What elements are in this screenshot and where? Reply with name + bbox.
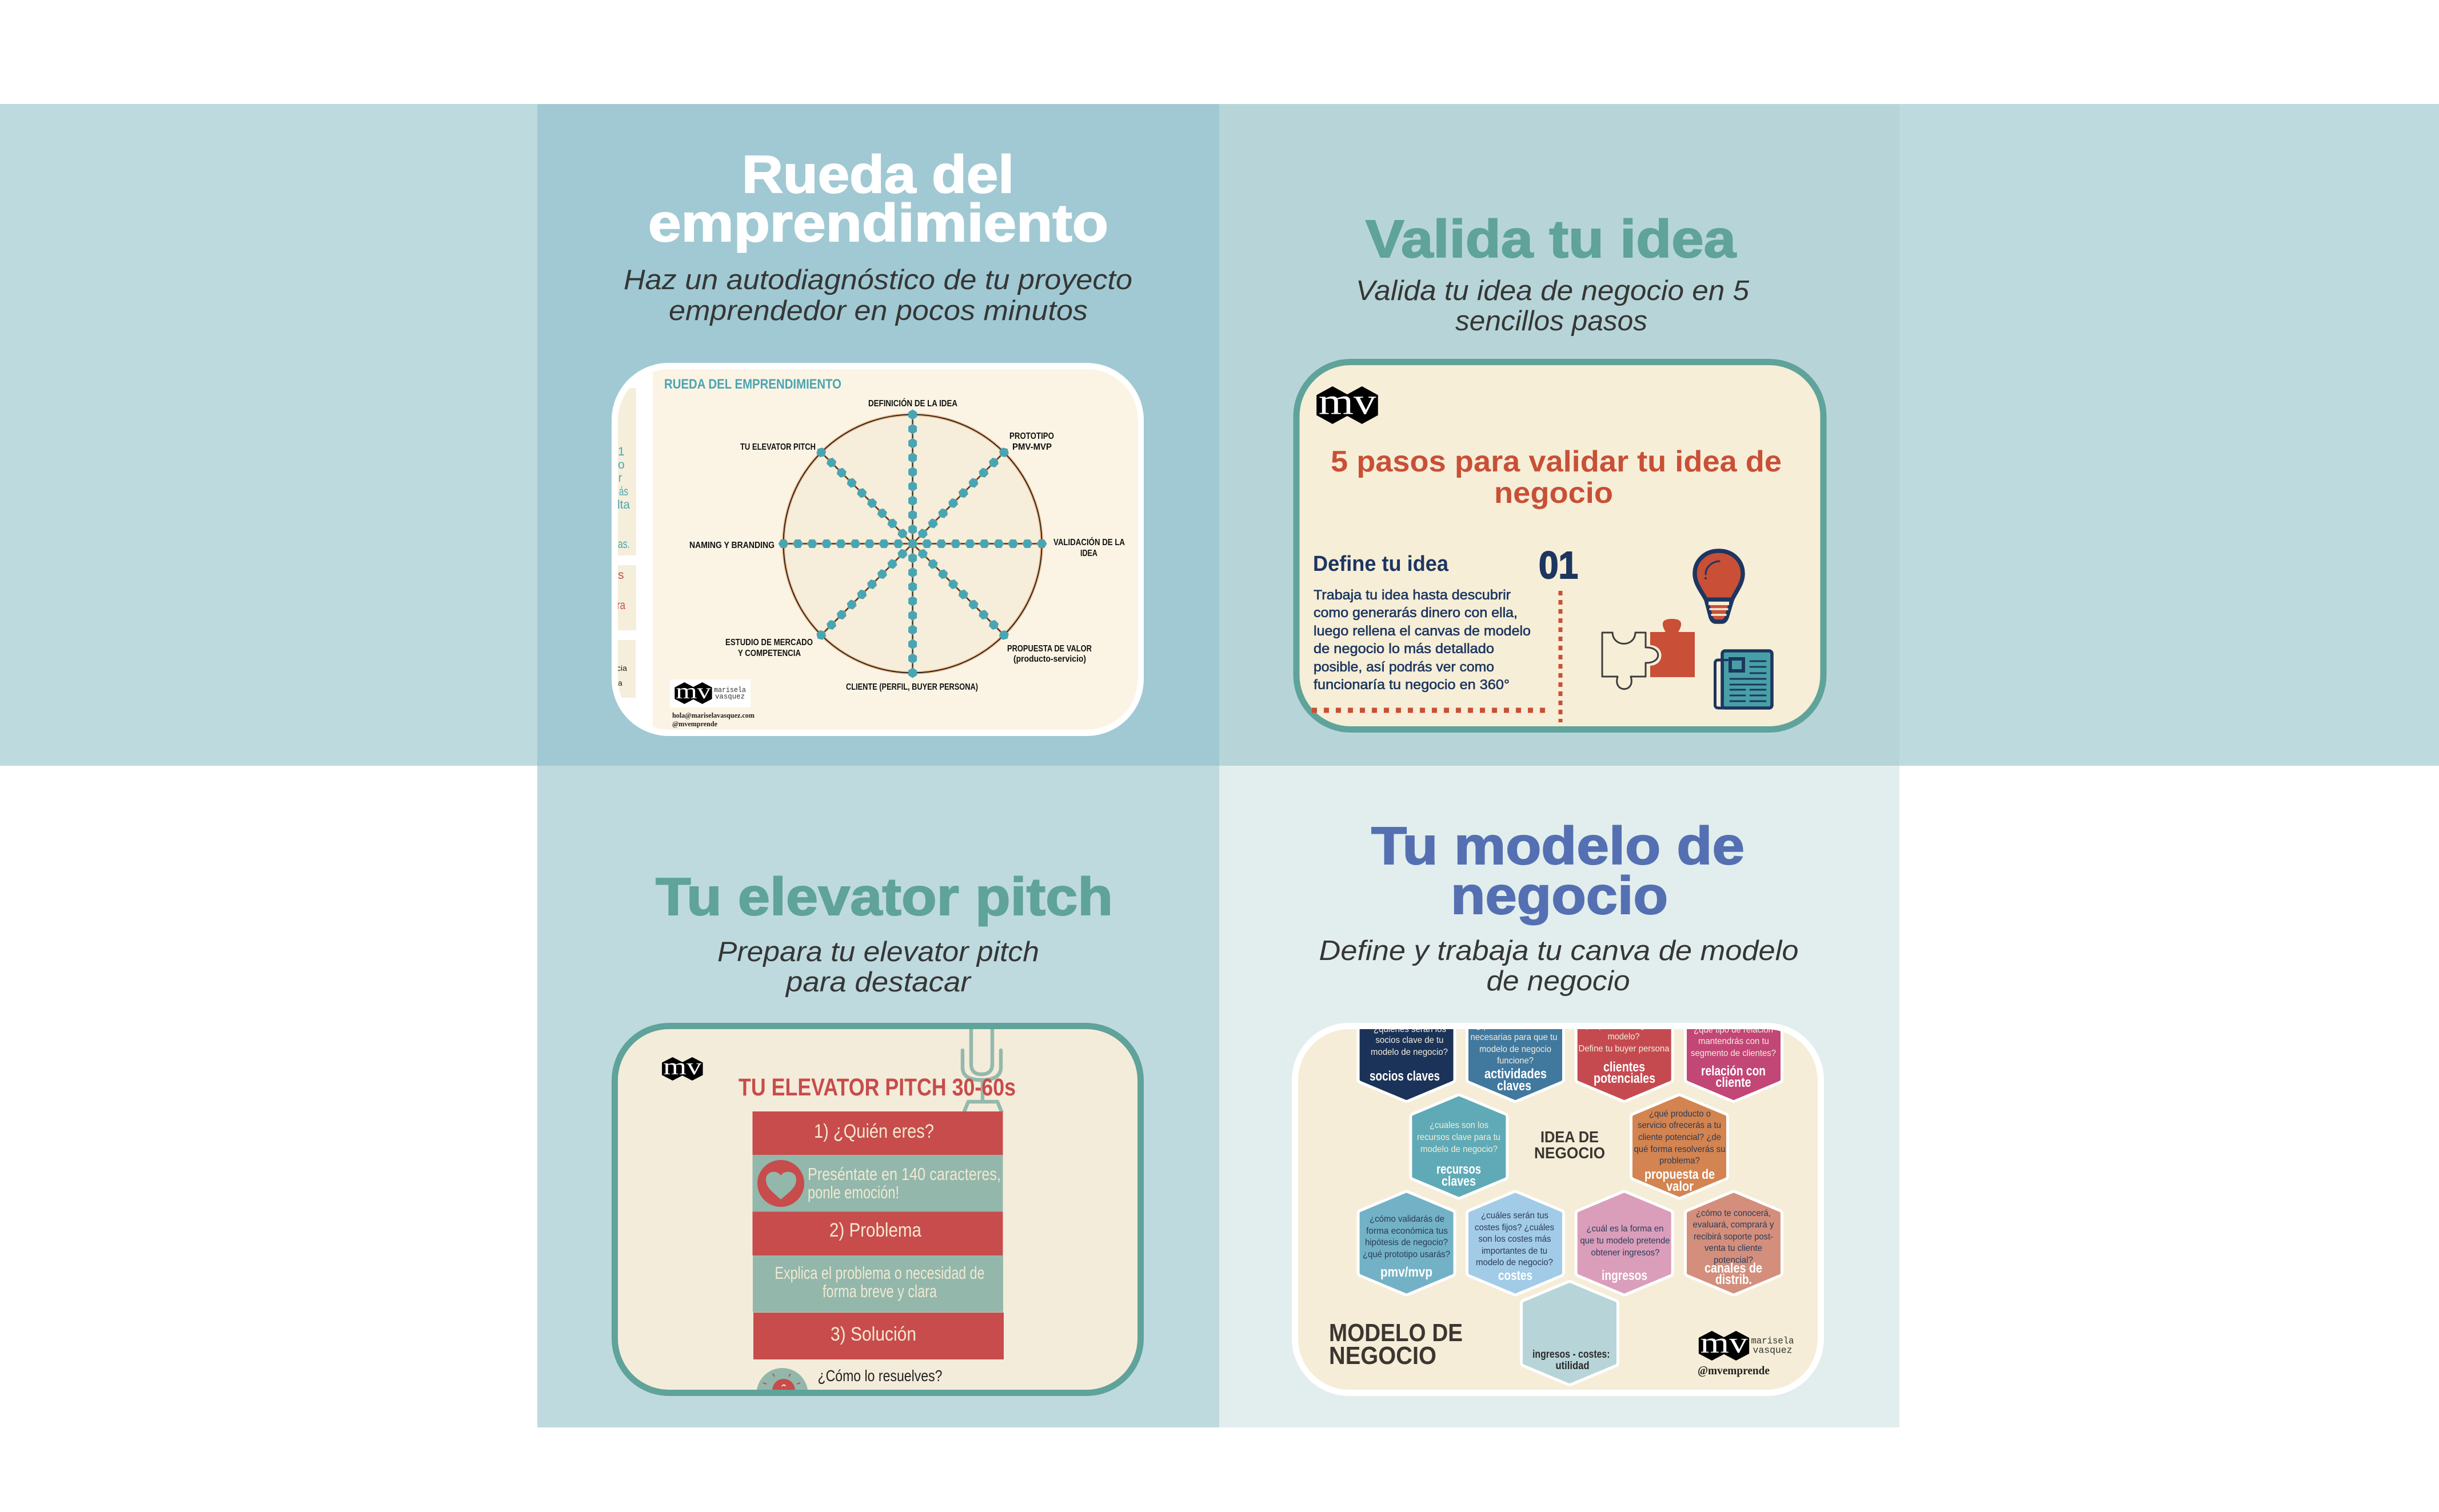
row: presentate: Preséntate en 140 caracteres, <box>808 1164 1001 1184</box>
hexagon: pmv/mvp: forma económica tus <box>1366 1226 1448 1236</box>
contact details <box>672 711 755 728</box>
cropped side notes: lta <box>617 498 630 511</box>
subtitle: Valida tu idea de negocio en 5 <box>1356 275 1750 306</box>
step body text: posible, así podrás ver como <box>1314 659 1494 675</box>
hexagon: pmv/mvp: ¿qué prototipo usarás? <box>1363 1250 1450 1259</box>
wheel labels: (producto-servicio) <box>1013 654 1086 664</box>
cropped side notes: ra <box>617 599 625 612</box>
worksheet title: TU ELEVATOR PITCH 30-60s <box>739 1074 1016 1101</box>
subtitle: de negocio <box>1486 966 1630 997</box>
logo: marisela vasquez: marisela <box>1751 1336 1794 1347</box>
subtitle <box>1319 935 1798 997</box>
hexagon: clientes potenciales: Define tu buyer persona <box>1579 1044 1670 1054</box>
step body text: como generarás dinero con ella, <box>1314 605 1518 621</box>
hexagon: socios claves: ¿quiénes serán los <box>1374 1025 1446 1034</box>
step number: 01 <box>1539 544 1578 587</box>
heading: tu modelo de negocio: negocio <box>1451 866 1668 925</box>
hexagon: propuesta de valor: cliente potencial? ¿de <box>1638 1133 1721 1142</box>
heading: rueda del emprendimiento: emprendimiento <box>648 193 1108 253</box>
subtitle: sencillos pasos <box>1455 306 1647 337</box>
hexagon: pmv/mvp: pmv/mvp <box>1380 1265 1432 1280</box>
cropped side notes: a <box>618 678 622 687</box>
panel: tu elevator pitch <box>537 766 1219 1427</box>
hexagon: clientes potenciales <box>1579 1001 1670 1098</box>
icon: microphone <box>963 1026 1001 1111</box>
hexagon: actividades claves: funcione? <box>1497 1056 1534 1066</box>
cropped side notes <box>617 388 636 698</box>
background band: right <box>1899 104 2439 766</box>
icon: lightbulb <box>1695 551 1743 622</box>
hexagon: canales de distribucion: distrib. <box>1715 1272 1752 1287</box>
wheel labels: PMV-MVP <box>1012 442 1052 452</box>
hexagon: canales de distribucion: ¿cómo te conocerá, <box>1696 1209 1771 1218</box>
cropped side notes: ás <box>619 485 628 498</box>
hexagon: propuesta de valor: problema? <box>1659 1156 1700 1166</box>
row: quien eres: 1) ¿Quién eres? <box>814 1121 934 1142</box>
logo mv: mv <box>663 1054 702 1080</box>
wheel labels: DEFINICIÓN DE LA IDEA <box>868 398 957 409</box>
hexagon: actividades claves <box>1470 1001 1560 1098</box>
hexagon: ingresos menos costes: utilidad <box>1556 1360 1589 1372</box>
icon: idea circle <box>757 1368 808 1390</box>
background band: left <box>0 104 537 766</box>
step body text: Trabaja tu idea hasta descubrir <box>1314 587 1511 603</box>
hexagon: clientes potenciales: ¿a quién va dirigido tu <box>1584 1021 1664 1030</box>
subtitle: Define y trabaja tu canva de modelo <box>1319 935 1798 966</box>
step body text: funcionaría tu negocio en 360° <box>1314 677 1510 693</box>
row: solucion: 3) Solución <box>831 1323 916 1345</box>
hexagon: canales de distribucion: recibirá soporte post- <box>1694 1232 1773 1242</box>
logo: marisela vasquez: mv <box>676 679 711 703</box>
hexagon: recursos claves <box>1414 1098 1504 1195</box>
hexagon: clientes potenciales: modelo? <box>1607 1032 1640 1042</box>
hexagon: canales de distribucion: canales de <box>1704 1261 1762 1276</box>
card: 5 pasos <box>1296 362 1823 729</box>
hexagon: propuesta de valor: propuesta de <box>1644 1167 1715 1182</box>
hexagon: actividades claves: modelo de negocio <box>1479 1045 1551 1054</box>
label: idea de negocio: NEGOCIO <box>1534 1144 1605 1162</box>
hexagon: relacion con cliente: mantendrás con tu <box>1698 1037 1769 1046</box>
logo mv: mv <box>1319 381 1376 422</box>
hexagon: recursos claves: recursos clave para tu <box>1417 1133 1500 1142</box>
cropped side notes: o <box>618 458 625 471</box>
wheel chart <box>779 409 1047 678</box>
logo: marisela vasquez <box>1698 1326 1794 1377</box>
hexagon: clientes potenciales: potenciales <box>1594 1071 1655 1086</box>
worksheet title: RUEDA DEL EMPRENDIMIENTO <box>664 377 841 392</box>
label: idea de negocio: IDEA DE <box>1540 1128 1599 1146</box>
hexagon: recursos claves: claves <box>1442 1174 1476 1189</box>
hexagon: actividades claves: actividades <box>1484 1066 1547 1082</box>
hexagon: canales de distribucion <box>1688 1194 1779 1291</box>
row: presentate <box>752 1155 1003 1211</box>
hexagon: socios claves: socios clave de tu <box>1375 1035 1444 1045</box>
card heading <box>1331 445 1782 510</box>
hexagon: ingresos: obtener ingresos? <box>1591 1248 1660 1258</box>
hexagon: propuesta de valor: qué forma resolverás su <box>1634 1145 1725 1154</box>
logo: marisela vasquez: mv <box>1700 1326 1748 1359</box>
wheel labels: CLIENTE (PERFIL, BUYER PERSONA) <box>846 682 978 692</box>
hexagon: ingresos menos costes <box>1524 1285 1615 1382</box>
hexagon: costes: costes <box>1498 1268 1532 1283</box>
subtitle: Prepara tu elevator pitch <box>717 937 1039 967</box>
wheel labels: IDEA <box>1080 549 1097 558</box>
label: modelo de negocio: NEGOCIO <box>1329 1342 1436 1370</box>
logo: marisela vasquez: vasquez <box>1753 1345 1793 1357</box>
heading: rueda del emprendimiento <box>648 145 1108 253</box>
wheel labels: ESTUDIO DE MERCADO <box>725 638 813 647</box>
subtitle: emprendedor en pocos minutos <box>669 295 1088 326</box>
hexagon: pmv/mvp <box>1362 1194 1452 1291</box>
logo: marisela vasquez: vasquez <box>715 693 745 701</box>
hexagon: pmv/mvp: hipótesis de negocio? <box>1365 1238 1448 1247</box>
panel: tu modelo de negocio <box>1219 766 1899 1427</box>
cropped side notes: 1 <box>618 445 625 458</box>
card: business model canvas <box>1295 1001 1821 1393</box>
hexagon: clientes potenciales: clientes <box>1603 1059 1645 1075</box>
hexagon: costes: modelo de negocio? <box>1476 1258 1553 1267</box>
wheel labels: PROTOTIPO <box>1009 431 1054 441</box>
label: modelo de negocio: MODELO DE <box>1329 1319 1463 1347</box>
wheel labels: Y COMPETENCIA <box>738 649 801 658</box>
cropped side notes: r <box>618 471 622 485</box>
icon: newspaper <box>1715 651 1772 708</box>
hexagon grid <box>1362 1001 1779 1098</box>
label: idea de negocio <box>1534 1128 1605 1162</box>
row: problema: 2) Problema <box>829 1219 921 1241</box>
hexagon: canales de distribucion: venta tu cliente <box>1704 1243 1762 1253</box>
step heading: Define tu idea <box>1313 552 1449 576</box>
worksheet content <box>617 369 1139 730</box>
row: solucion <box>753 1313 1004 1359</box>
hexagon: socios claves: modelo de negocio? <box>1371 1047 1448 1057</box>
step body text: de negocio lo más detallado <box>1314 641 1494 657</box>
hexagon: relacion con cliente: relación con <box>1701 1063 1766 1079</box>
card: wheel worksheet <box>612 363 1144 736</box>
heading: tu modelo de negocio <box>1371 816 1745 925</box>
hexagon: relacion con cliente <box>1688 1001 1779 1098</box>
contact details: hola@mariselavasquez.com <box>672 711 755 719</box>
hexagon: costes: ¿cuáles serán tus <box>1481 1211 1548 1221</box>
wheel labels <box>689 398 1125 692</box>
hexagon: canales de distribucion: potencial? <box>1714 1255 1753 1265</box>
card heading: 5 pasos para validar tu idea de <box>1331 445 1782 478</box>
hexagon: ingresos: que tu modelo pretende <box>1580 1236 1670 1246</box>
card heading: negocio <box>1494 477 1613 510</box>
hexagon: propuesta de valor <box>1634 1098 1725 1195</box>
hexagon: recursos claves: modelo de negocio? <box>1420 1145 1498 1154</box>
logo: marisela vasquez <box>670 679 751 707</box>
subtitle <box>717 937 1039 998</box>
hexagon: ingresos <box>1579 1194 1670 1291</box>
hexagon: socios claves: socios claves <box>1370 1069 1440 1084</box>
heading: tu modelo de negocio: Tu modelo de <box>1371 816 1745 875</box>
subtitle: para destacar <box>785 967 972 998</box>
wheel labels: NAMING Y BRANDING <box>689 541 775 550</box>
row: quien eres <box>752 1111 1003 1155</box>
panel: valida tu idea <box>1219 104 1899 766</box>
row: problema <box>752 1211 1003 1255</box>
subtitle: Haz un autodiagnóstico de tu proyecto <box>624 265 1132 295</box>
icon: heart <box>757 1160 804 1207</box>
hexagon: propuesta de valor: valor <box>1666 1179 1694 1194</box>
logo: marisela vasquez: marisela <box>714 686 746 694</box>
worksheet content <box>752 1026 1004 1419</box>
hexagon: canales de distribucion: evaluará, comprará y <box>1693 1220 1774 1230</box>
wheel labels: PROPUESTA DE VALOR <box>1007 644 1092 654</box>
hexagon: ingresos menos costes: ingresos - costes: <box>1532 1349 1610 1361</box>
label: modelo de negocio <box>1329 1319 1463 1370</box>
card: elevator pitch worksheet <box>615 1026 1141 1419</box>
step body text: luego rellena el canvas de modelo <box>1314 623 1531 639</box>
heading: valida tu idea: Valida tu idea <box>1366 209 1737 269</box>
subtitle <box>624 265 1132 326</box>
logo: marisela vasquez: @mvemprende <box>1698 1363 1770 1377</box>
hexagon: propuesta de valor: ¿qué producto o <box>1649 1109 1711 1119</box>
wheel labels: VALIDACIÓN DE LA <box>1053 537 1125 547</box>
hexagon: relacion con cliente: segmento de clientes? <box>1691 1049 1776 1058</box>
contact details: @mvemprende <box>672 719 717 728</box>
wheel labels: TU ELEVATOR PITCH <box>740 442 816 452</box>
icon: white puzzle piece <box>1602 633 1658 689</box>
subtitle <box>1356 275 1750 337</box>
cropped side notes: cia <box>617 663 627 673</box>
hexagon: recursos claves: ¿cuales son los <box>1430 1121 1488 1130</box>
panel: rueda del emprendimiento <box>537 104 1219 766</box>
hexagon: ingresos: ¿cuál es la forma en <box>1587 1224 1663 1234</box>
row: presentate: ponle emoción! <box>808 1182 899 1202</box>
hexagon: actividades claves: necesarias para que tu <box>1470 1033 1557 1042</box>
hexagon: costes: son los costes más <box>1478 1234 1551 1244</box>
cropped side notes: s <box>618 569 624 582</box>
hexagon: recursos claves: recursos <box>1436 1162 1481 1177</box>
hexagon: propuesta de valor: servicio ofrecerás a tu <box>1638 1121 1721 1130</box>
hexagon: actividades claves: claves <box>1497 1078 1531 1094</box>
hexagon: costes: importantes de tu <box>1482 1246 1547 1256</box>
row: como lo resuelves: ¿Cómo lo resuelves? <box>817 1367 942 1385</box>
hexagon: relacion con cliente: ¿qué tipo de relación <box>1694 1025 1773 1035</box>
hexagon: ingresos: ingresos <box>1602 1268 1647 1283</box>
heading: tu elevator pitch: Tu elevator pitch <box>656 867 1113 926</box>
hexagon: socios claves <box>1362 1001 1452 1098</box>
hexagon: costes: costes fijos? ¿cuáles <box>1475 1223 1554 1233</box>
hexagon: actividades claves: ¿qué actividades son <box>1476 1021 1553 1031</box>
cropped side notes: as. <box>618 538 630 551</box>
row: explica: forma breve y clara <box>823 1281 937 1301</box>
step body text <box>1314 587 1531 693</box>
hexagon: costes <box>1470 1194 1560 1291</box>
hexagon: pmv/mvp: ¿cómo validarás de <box>1370 1214 1444 1224</box>
row: explica <box>753 1255 1003 1312</box>
heading: rueda del emprendimiento: Rueda del <box>742 145 1014 204</box>
row: explica: Explica el problema o necesidad de <box>775 1263 984 1283</box>
icon: red puzzle piece <box>1650 619 1695 677</box>
hexagon: relacion con cliente: cliente <box>1716 1075 1751 1090</box>
